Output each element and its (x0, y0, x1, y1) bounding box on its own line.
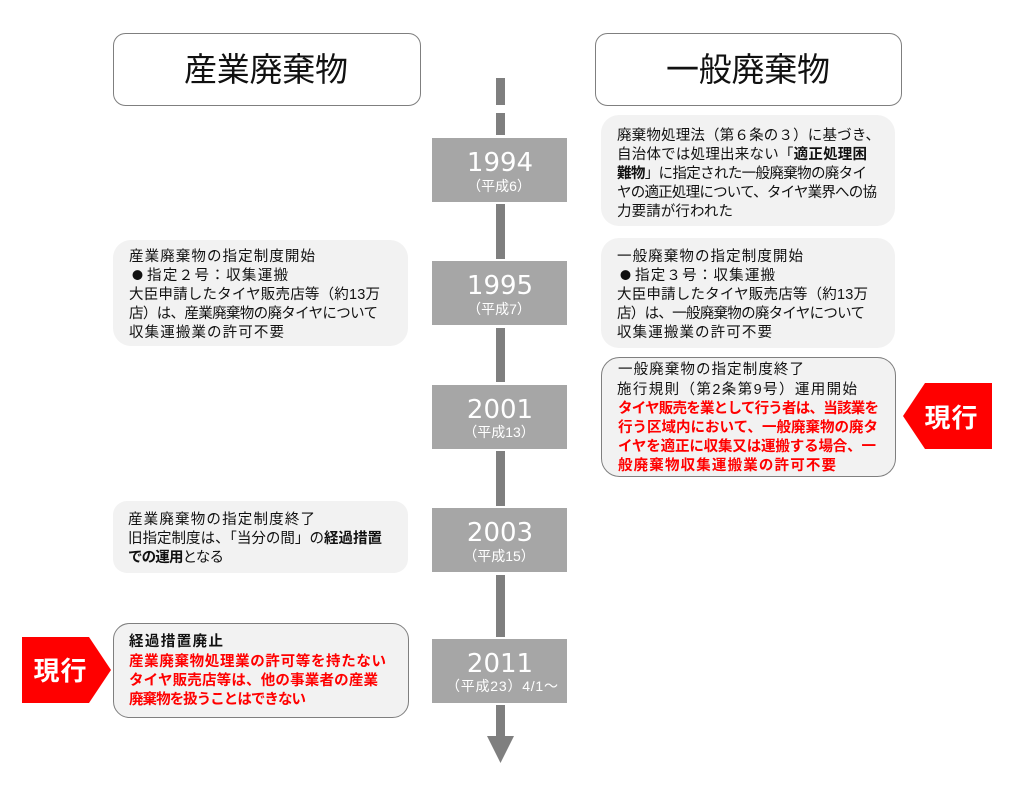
year: 2011: （平成23）4/1～ (446, 678, 558, 694)
panel: 1994 一般廃棄物: ヤの適正処理について、タイヤ業界への協 (617, 184, 877, 201)
panel: 1994 一般廃棄物: 力要請が行われた (617, 203, 733, 220)
year: 1994: （平成6） (467, 178, 531, 194)
year: 1995 (432, 261, 567, 325)
heading: 一般廃棄物 (596, 34, 902, 106)
panel: 1995 一般廃棄物: 指定３号：収集運搬 (635, 264, 776, 285)
panel: 1995 産業廃棄物: ● (132, 267, 143, 283)
panel: 1995 一般廃棄物: 収集運搬業の許可不要 (617, 324, 772, 341)
panel: 2003 産業廃棄物: での運用となる (128, 549, 224, 566)
year: 1994: 1994 (467, 148, 533, 178)
panel: 2001 一般廃棄物 (現行): 一般廃棄物の指定制度終了 (618, 361, 804, 378)
heading: 産業廃棄物: 産業廃棄物 (184, 51, 348, 88)
year: 2001: 2001 (467, 395, 533, 425)
timeline arrow (487, 78, 514, 763)
panel: 2001 一般廃棄物 (現行): 行う区域内において、一般廃棄物の廃タ (618, 418, 878, 436)
panel: 1994 一般廃棄物: 自治体では処理出来ない「適正処理困 (617, 145, 867, 163)
panel: 2003 産業廃棄物: 産業廃棄物の指定制度終了 (128, 511, 315, 528)
panel: 1995 産業廃棄物: 大臣申請したタイヤ販売店等（約13万 (129, 285, 380, 303)
panel: 1995 産業廃棄物 (113, 240, 408, 346)
panel: 1995 一般廃棄物: 一般廃棄物の指定制度開始 (617, 248, 804, 265)
year: 1994 (432, 138, 567, 202)
tag: 現行 right (903, 383, 992, 449)
year: 1995: 1995 (467, 271, 533, 301)
panel: 2001 一般廃棄物 (現行): イヤを適正に収集又は運搬する場合、一 (618, 437, 876, 455)
tag: 現行 right: 現行 (924, 403, 978, 433)
panel: 1994 一般廃棄物: 難物」に指定された一般廃棄物の廃タイ (617, 164, 867, 182)
panel: 1995 一般廃棄物 (601, 238, 895, 348)
panel: 2011 産業廃棄物 (現行): 産業廃棄物処理業の許可等を持たない (129, 652, 386, 670)
panel: 2001 一般廃棄物 (現行): 施行規則（第2条第9号）運用開始 (617, 381, 858, 398)
panel: 1995 産業廃棄物: 収集運搬業の許可不要 (129, 324, 284, 341)
panel: 1995 一般廃棄物: 店）は、一般廃棄物の廃タイヤについて (617, 305, 865, 322)
tag: 現行 left (22, 637, 111, 703)
year: 2001 (432, 385, 567, 449)
panel: 2001 一般廃棄物 (現行) (602, 358, 896, 476)
tag: 現行 left: 現行 (34, 656, 86, 686)
panel: 2003 産業廃棄物: 旧指定制度は、「当分の間」の経過措置 (128, 529, 382, 547)
panel: 2011 産業廃棄物 (現行): 廃棄物を扱うことはできない (129, 690, 306, 708)
year: 1995: （平成7） (467, 301, 531, 317)
panel: 2001 一般廃棄物 (現行): タイヤ販売を業として行う者は、当該業を (618, 399, 879, 417)
panel: 2011 産業廃棄物 (現行) (114, 624, 408, 718)
year: 2003: 2003 (467, 518, 533, 548)
panel: 1995 一般廃棄物: ● (620, 267, 631, 283)
panel: 2003 産業廃棄物 (113, 501, 408, 573)
panel: 1995 産業廃棄物: 店）は、産業廃棄物の廃タイヤについて (129, 305, 378, 322)
heading: 産業廃棄物 (114, 34, 420, 106)
panel: 1995 一般廃棄物: 大臣申請したタイヤ販売店等（約13万 (617, 285, 868, 303)
year: 2003 (432, 508, 567, 572)
year: 2003: （平成15） (463, 548, 535, 564)
panel: 2011 産業廃棄物 (現行): 経過措置廃止 (129, 632, 223, 650)
panel: 1994 一般廃棄物: 廃棄物処理法（第６条の３）に基づき、 (617, 127, 880, 144)
heading: 一般廃棄物: 一般廃棄物 (666, 51, 830, 88)
panel: 2011 産業廃棄物 (現行): タイヤ販売店等は、他の事業者の産業 (129, 671, 378, 689)
year: 2011: 2011 (467, 649, 533, 679)
panel: 1994 一般廃棄物 (601, 115, 895, 226)
year: 2011 (432, 639, 567, 703)
panel: 1995 産業廃棄物: 指定２号：収集運搬 (147, 264, 288, 285)
year: 2001: （平成13） (463, 424, 535, 440)
panel: 1995 産業廃棄物: 産業廃棄物の指定制度開始 (129, 248, 316, 265)
panel: 2001 一般廃棄物 (現行): 般廃棄物収集運搬業の許可不要 (618, 456, 836, 474)
